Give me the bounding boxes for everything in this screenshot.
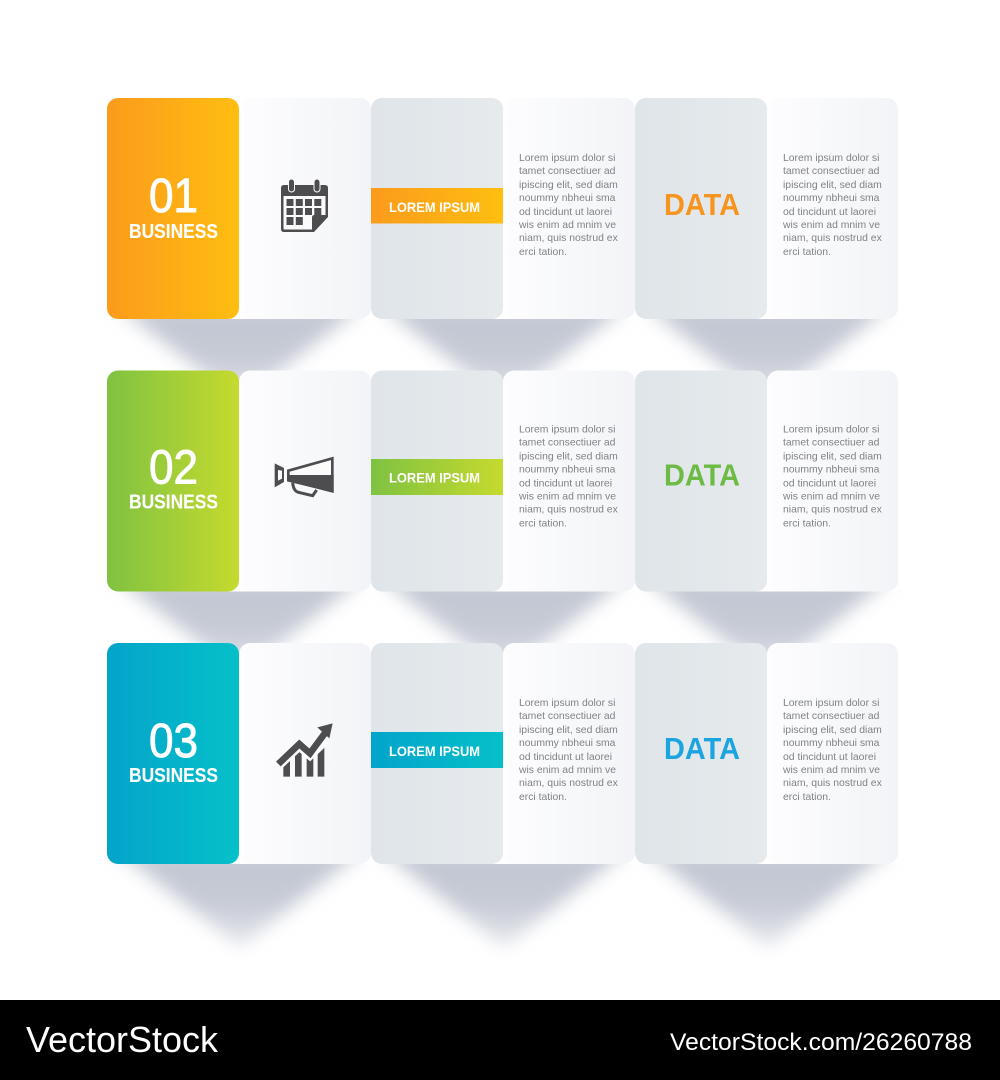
footer bar xyxy=(0,1000,1000,1080)
number and heading: BUSINESS xyxy=(129,221,218,243)
text block: tamet consectiuer ad xyxy=(783,711,880,722)
label band xyxy=(371,459,503,495)
text block: tamet consectiuer ad xyxy=(783,438,880,448)
text block: ipiscing elit, sed diam xyxy=(519,452,618,462)
text block xyxy=(782,153,883,258)
text block: od tincidunt ut laorei xyxy=(783,752,876,763)
number and heading: 02 xyxy=(149,442,198,494)
row 2: 02 business xyxy=(107,370,898,674)
text block: wis enim ad mnim ve xyxy=(782,220,880,231)
image id: VectorStock.com/26260788 xyxy=(670,1029,972,1056)
number and heading: BUSINESS xyxy=(129,492,218,514)
label band xyxy=(371,732,503,768)
number and heading: 03 xyxy=(149,715,198,768)
text block: Lorem ipsum dolor si xyxy=(519,153,615,164)
text block: od tincidunt ut laorei xyxy=(783,207,876,218)
icon: growth chart xyxy=(276,723,333,777)
number and heading xyxy=(129,442,218,514)
text block: tamet consectiuer ad xyxy=(783,166,880,177)
text block xyxy=(782,698,883,803)
text block: od tincidunt ut laorei xyxy=(519,752,612,763)
text block: wis enim ad mnim ve xyxy=(518,220,616,231)
shadows xyxy=(122,319,886,380)
text block: Lorem ipsum dolor si xyxy=(783,698,879,709)
text block: erci tation. xyxy=(783,247,831,258)
panels xyxy=(107,98,898,319)
text block: erci tation. xyxy=(519,792,567,803)
text block: wis enim ad mnim ve xyxy=(518,492,616,502)
text block xyxy=(782,424,883,530)
text block xyxy=(518,424,619,530)
number and heading: BUSINESS xyxy=(129,765,218,787)
text block: tamet consectiuer ad xyxy=(519,438,616,448)
number and heading xyxy=(129,170,218,243)
icon: calendar xyxy=(281,179,328,232)
row 1: 01 business xyxy=(107,98,898,402)
text block: Lorem ipsum dolor si xyxy=(783,153,879,164)
text block: erci tation. xyxy=(783,792,831,803)
text block: noummy nbheui sma xyxy=(783,464,880,476)
text block: niam, quis nostrud ex xyxy=(519,504,619,516)
icon: megaphone xyxy=(275,458,334,496)
text block: ipiscing elit, sed diam xyxy=(783,452,882,462)
panels xyxy=(107,643,898,864)
label band xyxy=(371,188,503,224)
text block: ipiscing elit, sed diam xyxy=(519,180,618,191)
text block: Lorem ipsum dolor si xyxy=(519,424,615,436)
text block: tamet consectiuer ad xyxy=(519,711,616,722)
text block: noummy nbheui sma xyxy=(783,738,880,749)
text block: noummy nbheui sma xyxy=(519,738,616,749)
text block xyxy=(518,153,619,258)
text block: Lorem ipsum dolor si xyxy=(783,424,879,436)
text block: od tincidunt ut laorei xyxy=(783,478,876,490)
text block: wis enim ad mnim ve xyxy=(518,765,616,776)
text block: niam, quis nostrud ex xyxy=(519,778,619,789)
text block: ipiscing elit, sed diam xyxy=(519,725,618,736)
text block: noummy nbheui sma xyxy=(519,193,616,204)
data value: DATA xyxy=(664,731,740,766)
label band: LOREM IPSUM xyxy=(389,743,480,759)
text block: niam, quis nostrud ex xyxy=(783,233,883,244)
text block: Lorem ipsum dolor si xyxy=(519,698,615,709)
text block: od tincidunt ut laorei xyxy=(519,207,612,218)
text block: erci tation. xyxy=(519,518,567,530)
watermark logo: VectorStock xyxy=(26,1019,219,1060)
text block: noummy nbheui sma xyxy=(519,464,616,476)
text block: tamet consectiuer ad xyxy=(519,166,616,177)
row 3: 03 business xyxy=(107,643,898,947)
text block: niam, quis nostrud ex xyxy=(783,504,883,516)
text block: niam, quis nostrud ex xyxy=(519,233,619,244)
data value: DATA xyxy=(664,458,740,492)
shadows xyxy=(122,864,886,948)
text block: od tincidunt ut laorei xyxy=(519,478,612,490)
text block: ipiscing elit, sed diam xyxy=(783,180,882,191)
text block: wis enim ad mnim ve xyxy=(782,765,880,776)
text block: ipiscing elit, sed diam xyxy=(783,725,882,736)
text block xyxy=(518,698,619,803)
number and heading: 01 xyxy=(149,170,198,223)
text block: erci tation. xyxy=(783,518,831,530)
text block: wis enim ad mnim ve xyxy=(782,492,880,502)
label band: LOREM IPSUM xyxy=(389,470,480,486)
shadows xyxy=(122,592,886,653)
panels xyxy=(107,370,898,592)
data value: DATA xyxy=(664,187,740,222)
text block: niam, quis nostrud ex xyxy=(783,778,883,789)
number and heading xyxy=(129,715,218,787)
label band: LOREM IPSUM xyxy=(389,199,480,215)
text block: noummy nbheui sma xyxy=(783,193,880,204)
text block: erci tation. xyxy=(519,247,567,258)
